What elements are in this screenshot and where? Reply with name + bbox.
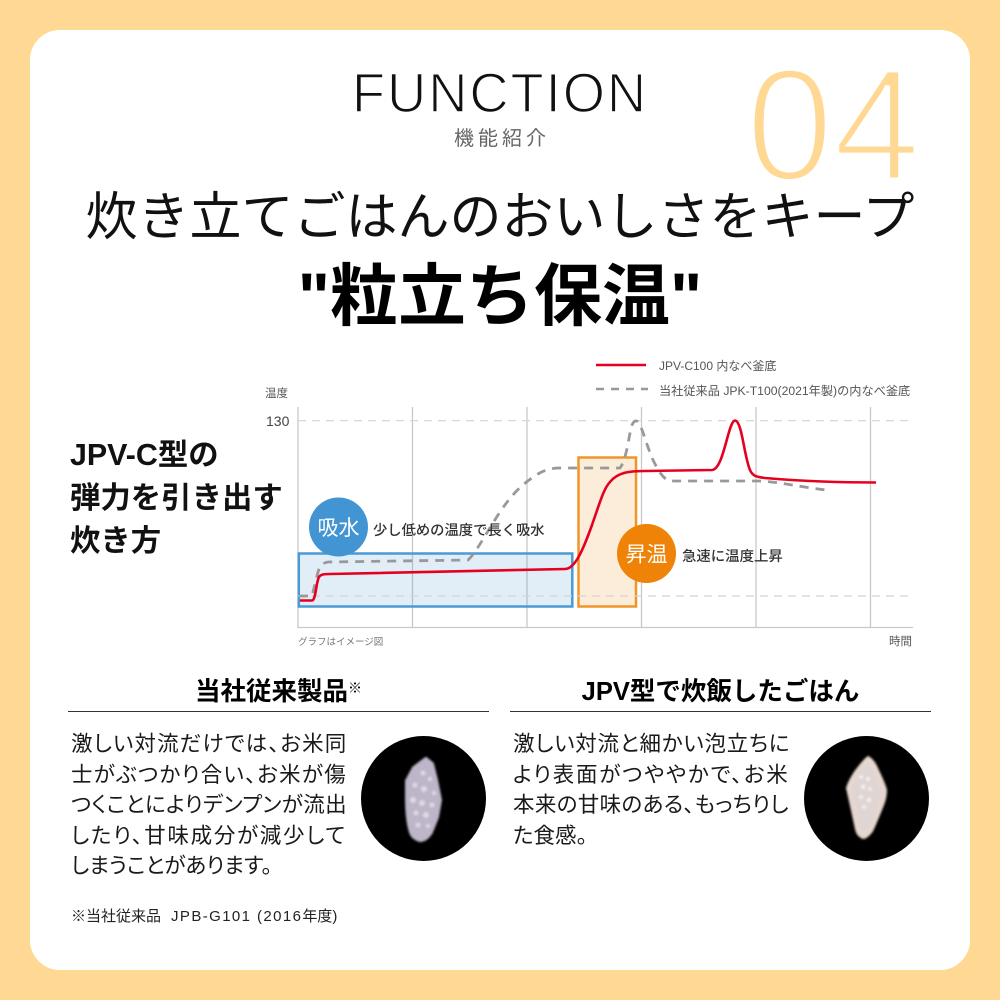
badge: 吸水 bbox=[309, 498, 368, 556]
panel: conventional product bbox=[68, 678, 489, 925]
text: conventional description: 激しい対流だけでは、お米同 bbox=[71, 732, 347, 756]
left caption: 弾力を引き出す bbox=[70, 481, 283, 515]
orange heating zone bbox=[578, 458, 636, 606]
label: absorption note: 少し低めの温度で長く吸水 bbox=[373, 522, 545, 539]
blue absorption zone bbox=[299, 554, 572, 606]
badge: 昇温 bbox=[617, 524, 676, 583]
heading: conventional: 当社従来製品※ bbox=[195, 678, 362, 706]
text: JPV description: より表面がつややかで、お米 bbox=[513, 762, 790, 786]
heading: JPV: JPV型で炊飯したごはん bbox=[582, 678, 859, 706]
label: heating note: 急速に温度上昇 bbox=[682, 547, 783, 565]
big number 04: 04 bbox=[746, 35, 920, 214]
text: JPV description: 本来の甘味のある、もっちりし bbox=[513, 793, 789, 817]
axis labels: 時間 bbox=[889, 635, 912, 648]
left caption: 炊き方 bbox=[70, 524, 161, 558]
legend bbox=[596, 359, 910, 398]
photo: glossy rice grain bbox=[804, 736, 929, 861]
red solid curve bbox=[300, 420, 876, 600]
text: conventional description bbox=[71, 732, 347, 878]
panel: JPV rice bbox=[510, 678, 931, 861]
text: conventional description: 士がぶつかり合い、お米が傷 bbox=[71, 762, 347, 786]
legend: JPV-C100 内なべ釜底 bbox=[659, 359, 776, 373]
gray dashed curve bbox=[299, 421, 826, 596]
left caption bbox=[70, 438, 283, 558]
text: conventional description: しまうことがあります。 bbox=[71, 854, 272, 878]
footnote: ※当社従来品 JPB-G101 (2016年度) bbox=[71, 908, 337, 925]
left caption: JPV-C型の bbox=[70, 438, 219, 472]
badge: 吸水: 吸水 bbox=[318, 517, 360, 540]
chart: temperature over time bbox=[265, 359, 913, 648]
axis labels: グラフはイメージ図 bbox=[298, 636, 383, 648]
legend: 当社従来品 JPK-T100(2021年製)の内なべ釜底 bbox=[659, 383, 910, 398]
text: conventional description: したり、甘味成分が減少して bbox=[71, 824, 347, 848]
title line 2: "粒立ち保温" bbox=[298, 259, 702, 335]
heading: FUNCTION: FUNCTION bbox=[352, 61, 648, 124]
badge: 昇温: 昇温 bbox=[626, 544, 668, 566]
text: conventional description: つくことによりデンプンが流出 bbox=[71, 793, 347, 817]
text: JPV description: た食感。 bbox=[513, 824, 587, 848]
title line 1: 炊き立てごはんのおいしさをキープ bbox=[86, 189, 914, 247]
axis labels bbox=[265, 386, 912, 648]
text: JPV description bbox=[513, 732, 790, 848]
axis labels: 温度 bbox=[265, 386, 288, 400]
axis labels: 130 bbox=[266, 413, 290, 429]
text: JPV description: 激しい対流と細かい泡立ちに bbox=[513, 732, 790, 756]
subheading: 機能紹介: 機能紹介 bbox=[454, 128, 550, 150]
photo: damaged rice grain bbox=[361, 736, 486, 861]
